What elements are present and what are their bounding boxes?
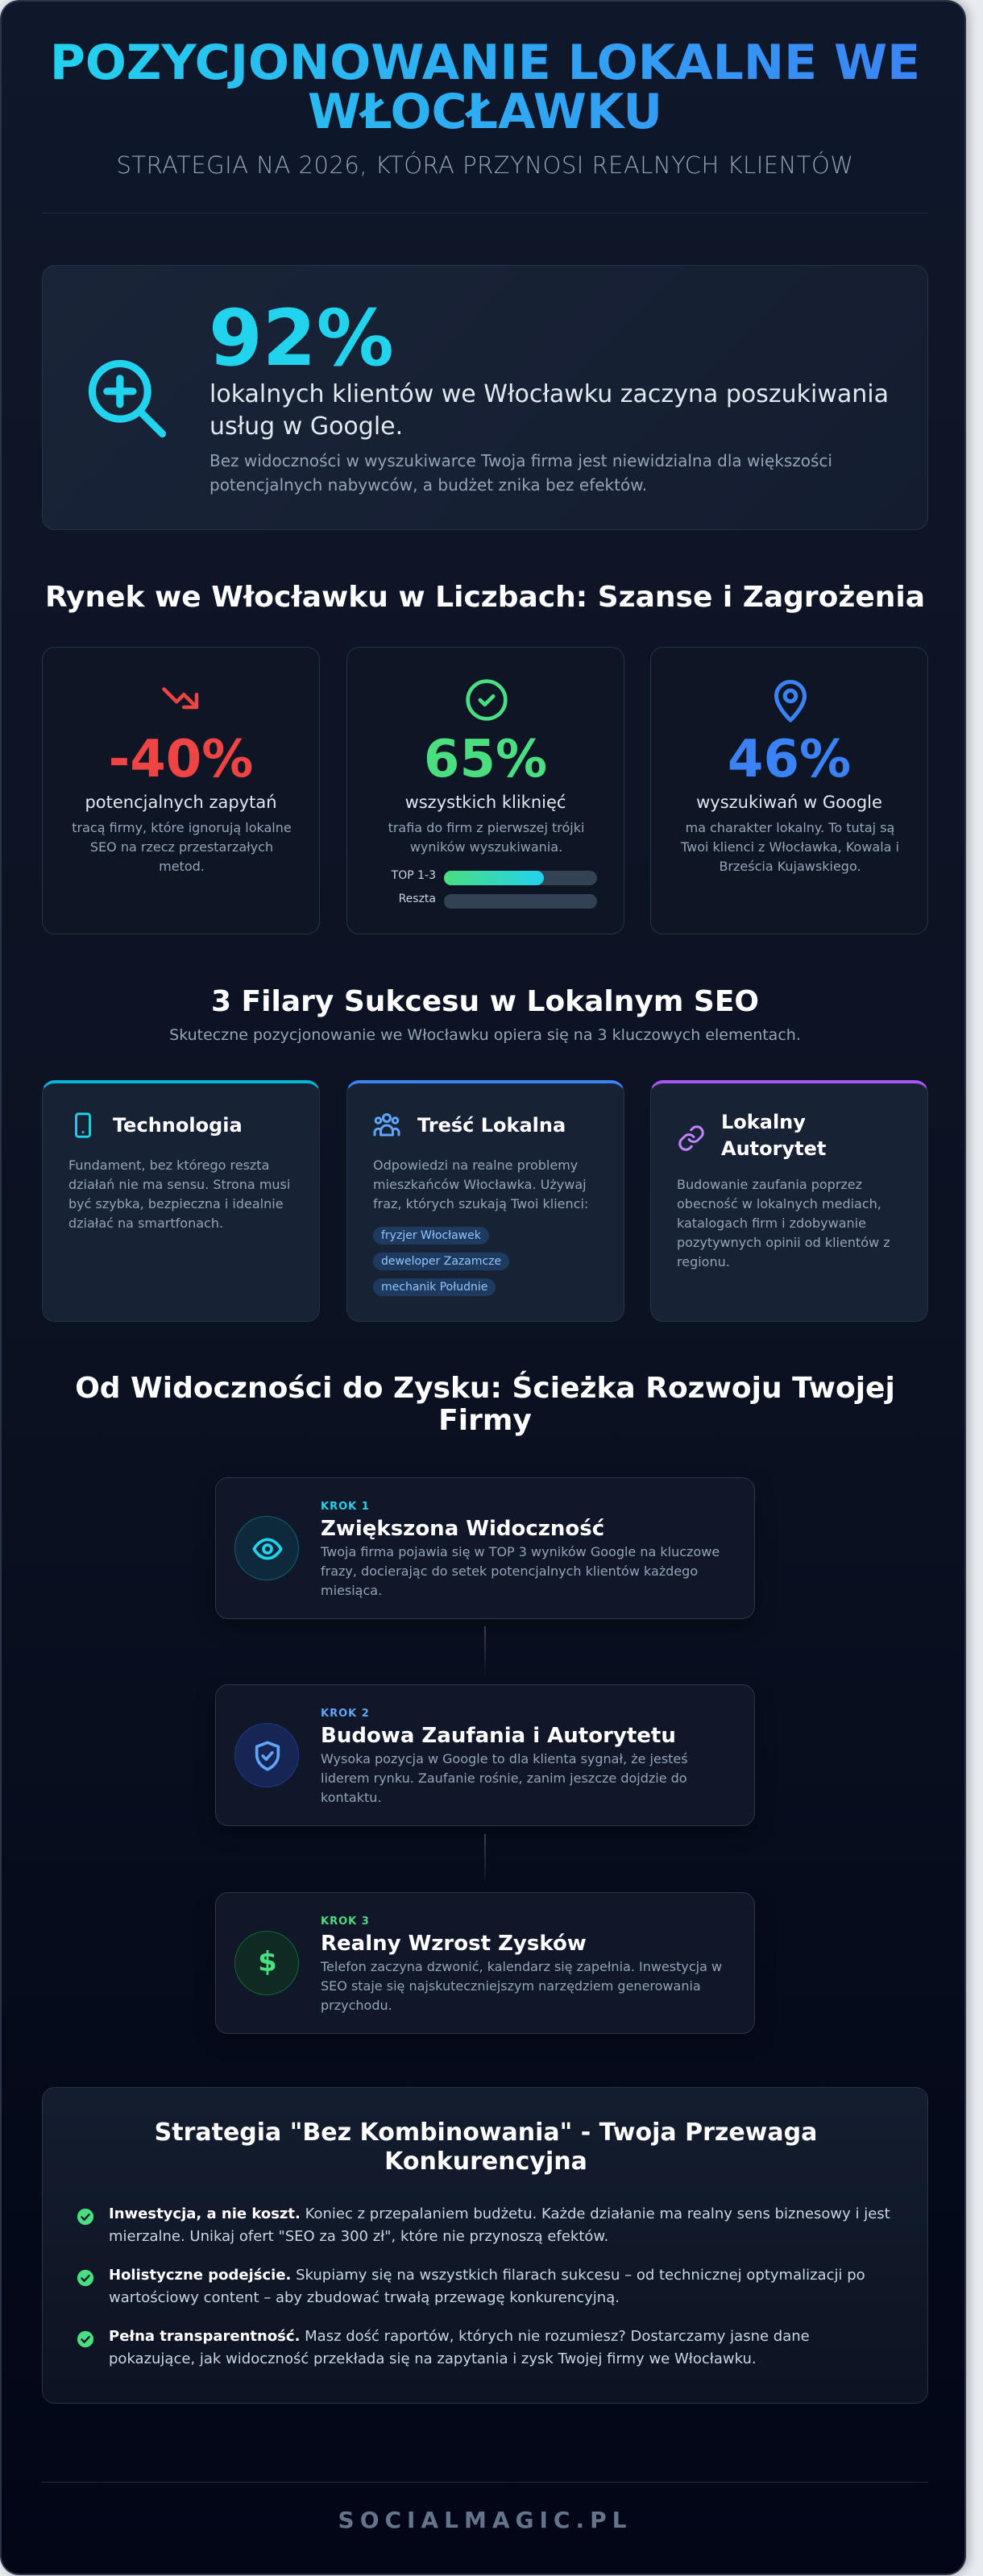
icon: eye: [234, 1516, 299, 1580]
strategy heading: Strategia "Bez Kombinowania" - Twoja Przewaga Konkurencyjna: [155, 2118, 817, 2176]
pillar title: Treść Lokalna: [417, 1114, 566, 1137]
subtitle: STRATEGIA NA 2026, KTÓRA PRZYNOSI REALNYCH KLIENTÓW: [116, 151, 854, 179]
label: wszystkich kliknięć: [405, 793, 566, 812]
icon: users: [374, 1113, 400, 1136]
step 2 card: Budowa Zaufania i Autorytetu: [321, 1724, 676, 1748]
icon: dollar: $: [258, 1946, 277, 1978]
stat number: 92%: [209, 293, 394, 383]
icon: magnifier: [89, 359, 166, 438]
step 1 card: KROK 1: [321, 1501, 370, 1513]
pillar description: Fundament, bez którego reszta działań nie ma sensu. Strona musi być szybka, bezpieczna i idealnie działać na smartfonach.: [68, 1158, 290, 1231]
step 3 card: Realny Wzrost Zysków: [321, 1932, 587, 1956]
pillar title: Technologia: [113, 1114, 243, 1137]
step 1 card: Zwiększona Widoczność: [321, 1517, 604, 1541]
panel: pillar tresc lokalna: [346, 1080, 624, 1322]
heading: 3 pillars: 3 Filary Sukcesu w Lokalnym SEO: [211, 985, 759, 1018]
icon: dollar: [234, 1931, 299, 1995]
icon: shield: [234, 1723, 299, 1787]
keyword tags: fryzjer Włocławek: [381, 1229, 481, 1242]
keyword tags: deweloper Zazamcze: [381, 1255, 501, 1268]
panel: stat 65%: [346, 647, 624, 934]
arrow: connector 1: [484, 1626, 486, 1675]
bar chart: [392, 869, 597, 909]
heading: market in numbers: Rynek we Włocławku w Liczbach: Szanse i Zagrożenia: [45, 581, 925, 614]
stat text: lokalnych klientów we Włocławku zaczyna poszukiwania usług w Google.: [209, 380, 889, 441]
step 1 card: Twoja firma pojawia się w TOP 3 wyników Google na kluczowe frazy, docierając do setek potencjalnych klientów każdego miesiąca.: [321, 1544, 720, 1598]
panel: stat -40%: [42, 647, 320, 934]
pillar title: [721, 1111, 826, 1160]
step 2 card: Wysoka pozycja w Google to dla klienta sygnał, że jesteś liderem rynku. Zaufanie rośnie, zanim jeszcze dojdzie do kontaktu.: [321, 1751, 688, 1805]
icon: link: [678, 1125, 704, 1151]
icon: map pin: [774, 680, 807, 723]
title: POZYCJONOWANIE LOKALNE WE: [50, 35, 920, 91]
title: [34, 39, 936, 137]
step 1 card: [215, 1477, 755, 1619]
stat description: Bez widoczności w wyszukiwarce Twoja firma jest niewidzialna dla większości potencjalnych nabywców, a budżet znika bez efektów.: [209, 451, 832, 495]
label: potencjalnych zapytań: [85, 793, 277, 812]
panel: stat 46%: [650, 647, 928, 934]
heading: path: Od Widoczności do Zysku: Ścieżka Rozwoju Twojej Firmy: [75, 1372, 895, 1437]
item 1: Inwestycja, a nie koszt. Koniec z przepalaniem budżetu. Każde działanie ma realny sens biznesowy i jest mierzalne. Unikaj ofert "SEO za 300 zł", które nie przynoszą efektów.: [109, 2205, 890, 2245]
step 3 card: [215, 1892, 755, 2034]
label: wyszukiwań w Google: [696, 793, 882, 812]
panel: pillar technologia: [42, 1080, 320, 1322]
description: trafia do firm z pierwszej trójki wyników wyszukiwania.: [388, 820, 584, 855]
pillar description: Odpowiedzi na realne problemy mieszkańców Włocławka. Używaj fraz, których szukają Twoi klienci:: [373, 1158, 588, 1211]
number: 46%: [728, 730, 851, 789]
description: ma charakter lokalny. To tutaj są Twoi klienci z Włocławka, Kowala i Brześcia Kujawskiego.: [681, 820, 899, 874]
pillar title: Autorytet: [721, 1137, 826, 1160]
icon: check circle: [466, 679, 508, 721]
panel: pillar lokalny autorytet: [650, 1080, 928, 1322]
number: -40%: [109, 730, 253, 789]
step 2 card: KROK 2: [321, 1708, 370, 1720]
description: tracą firmy, które ignorują lokalne SEO na rzecz przestarzałych metod.: [72, 820, 292, 874]
keyword tags: mechanik Południe: [381, 1281, 487, 1294]
subheading: pillars: Skuteczne pozycjonowanie we Włocławku opiera się na 3 kluczowych elementach.: [169, 1026, 801, 1044]
panel: hero stat 92%: [42, 265, 928, 530]
footer brand: SOCIALMAGIC.PL: [338, 2507, 632, 2533]
item 3: Pełna transparentność. Masz dość raportów, których nie rozumiesz? Dostarczamy jasne dane pokazujące, jak widoczność przekłada się na zapytania i zysk Twojej firmy we Włocławku.: [109, 2328, 810, 2367]
item 2: Holistyczne podejście. Skupiamy się na wszystkich filarach sukcesu – od technicznej optymalizacji po wartościowy content – aby zbudować trwałą przewagę konkurencyjną.: [109, 2267, 865, 2306]
pillar description: Budowanie zaufania poprzez obecność w lokalnych mediach, katalogach firm i zdobywanie pozytywnych opinii od klientów z regionu.: [677, 1177, 890, 1269]
step 3 card: KROK 3: [321, 1915, 370, 1928]
icon: trending down: [162, 687, 198, 709]
bar chart: Reszta: [399, 892, 436, 905]
keyword tags: [373, 1227, 509, 1296]
pillar title: Lokalny: [721, 1111, 806, 1133]
bar chart: TOP 1-3: [392, 869, 436, 882]
panel: strategy: [42, 2087, 928, 2404]
title: WŁOCŁAWKU: [308, 84, 662, 140]
number: 65%: [424, 730, 547, 789]
step 2 card: [215, 1684, 755, 1826]
arrow: connector 2: [484, 1834, 486, 1882]
icon: smartphone: [75, 1112, 91, 1138]
step 3 card: Telefon zaczyna dzwonić, kalendarz się zapełnia. Inwestycja w SEO staje się najskuteczniejszym narzędziem generowania przychodu.: [321, 1959, 722, 2013]
